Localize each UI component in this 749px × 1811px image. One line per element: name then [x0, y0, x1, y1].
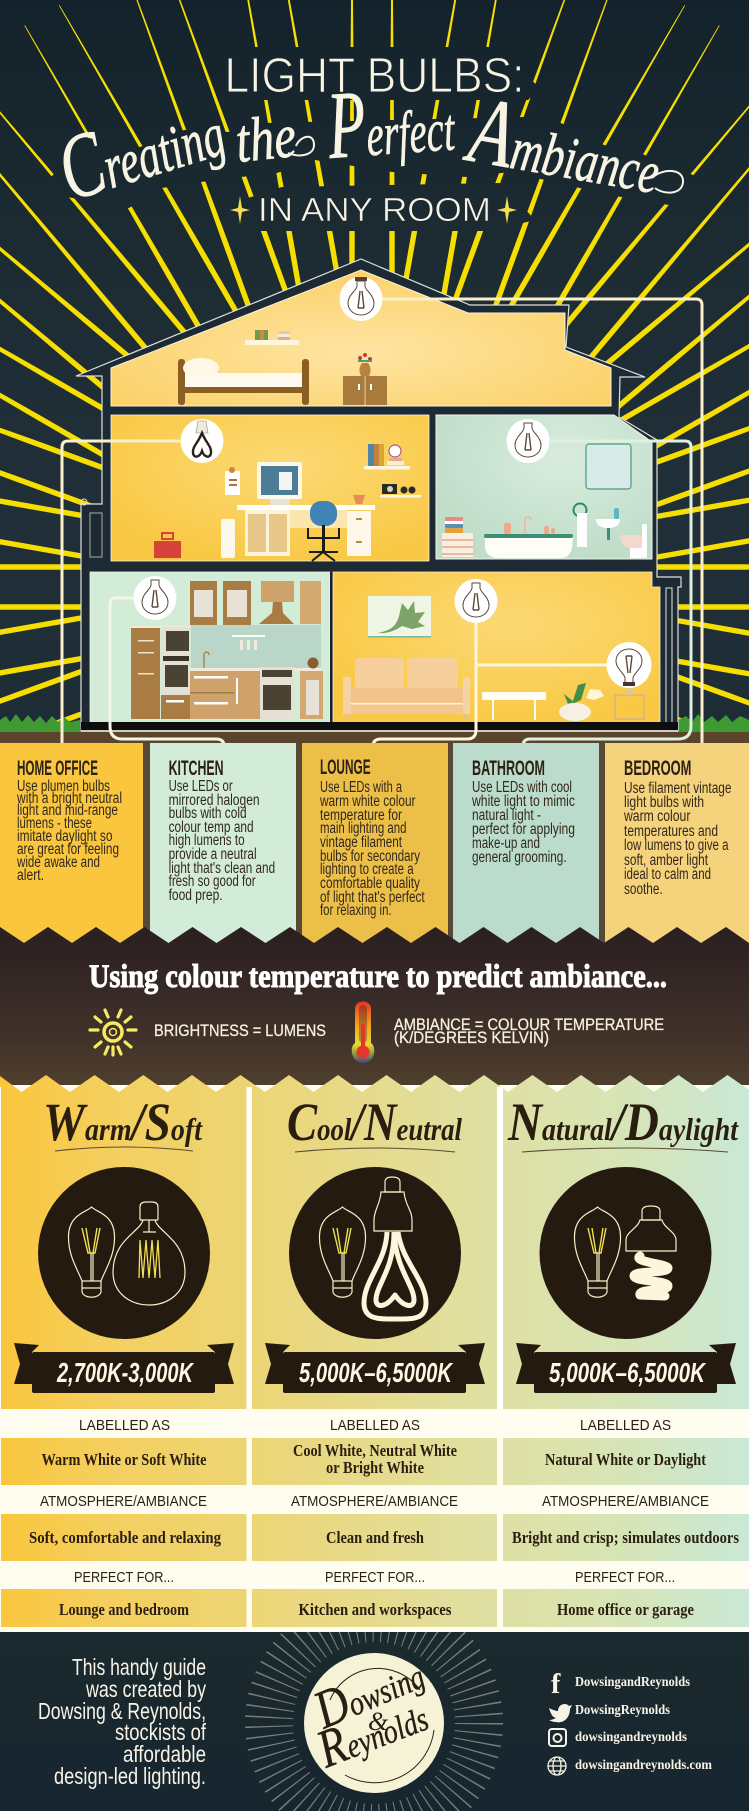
panel: kitchen: Use LEDs or: [169, 778, 233, 795]
table row: perfect for: Kitchen and workspaces: [298, 1600, 452, 1619]
comparison column tops: [0, 1075, 749, 1409]
panel: kitchen: light that's clean and: [169, 860, 275, 877]
bulb: lounge: [454, 579, 498, 623]
panel: bathroom: BATHROOM: [472, 757, 545, 780]
panel: home office: alert.: [17, 867, 44, 884]
room: lounge: [333, 572, 660, 723]
panel: kitchen: high lumens to: [169, 832, 245, 849]
panel: bathroom: white light to mimic: [471, 793, 575, 810]
panel: home office: lumens - these: [17, 815, 92, 832]
panel: bedroom: soothe.: [624, 881, 663, 898]
table row: perfect for: PERFECT FOR...: [74, 1569, 174, 1586]
panel: kitchen: mirrored halogen: [169, 792, 260, 809]
panel: home office: are great for feeling: [17, 841, 119, 858]
panel: home office: light and mid-range: [17, 802, 118, 819]
panel: kitchen: bulbs with cold: [169, 805, 247, 822]
table row: atmosphere: ATMOSPHERE/AMBIANCE: [40, 1493, 207, 1510]
label: brightness: BRIGHTNESS = LUMENS: [154, 1021, 326, 1040]
label: ambiance: (K/DEGREES KELVIN): [394, 1028, 549, 1047]
panel: kitchen: food prep.: [169, 887, 223, 904]
panel: home office: HOME OFFICE: [17, 757, 98, 780]
footer credit text: Dowsing & Reynolds,: [38, 1698, 206, 1724]
panel: home office: [0, 743, 143, 948]
panel: lounge: warm white colour: [319, 793, 416, 810]
panel: kitchen: KITCHEN: [169, 757, 224, 780]
panel: kitchen: colour temp and: [169, 819, 254, 836]
panel: bedroom: [605, 743, 749, 948]
title: the: [232, 102, 299, 176]
panel: bathroom: natural light -: [472, 807, 541, 824]
social links: dowsingandreynolds.com: [575, 1758, 712, 1773]
table row: labelled as: Warm White or Soft White: [42, 1450, 207, 1469]
panel: lounge: vintage filament: [320, 834, 403, 851]
ground and grass: [0, 714, 749, 750]
title: Creating: [46, 74, 235, 220]
house silhouette: [76, 259, 681, 731]
sun rays: [0, 0, 749, 722]
panel: bedroom: soft, amber light: [624, 852, 709, 869]
panel: lounge: of light that's perfect: [320, 889, 425, 906]
column: warm/soft: Warm/Soft: [43, 1092, 203, 1152]
icon: thermometer: [352, 1002, 374, 1063]
table row: atmosphere: [1, 1493, 749, 1561]
column: cool/neutral: 5,000K–6,5000K: [299, 1357, 453, 1388]
panel: lounge: lighting to create a: [320, 861, 414, 878]
table row: atmosphere: ATMOSPHERE/AMBIANCE: [291, 1493, 458, 1510]
title: IN ANY ROOM: [258, 191, 491, 228]
footer credit text: This handy guide: [72, 1654, 206, 1680]
panel: kitchen: provide a neutral: [169, 846, 257, 863]
panel: lounge: bulbs for secondary: [320, 848, 420, 865]
panel: kitchen: [150, 743, 296, 948]
room: kitchen: [90, 572, 333, 723]
table row: perfect for: [1, 1569, 749, 1627]
bulb: bedroom: [340, 277, 382, 321]
column: natural/daylight: [507, 1092, 739, 1393]
table row: perfect for: Lounge and bedroom: [59, 1600, 189, 1619]
title: Perfect: [323, 63, 458, 179]
title: [46, 49, 683, 228]
room: bedroom: [111, 270, 611, 406]
panel: kitchen: fresh so good for: [169, 873, 256, 890]
cream background for comparison table: [0, 1085, 749, 1632]
table row: atmosphere: ATMOSPHERE/AMBIANCE: [542, 1493, 709, 1510]
table row: labelled as: Cool White, Neutral White: [293, 1441, 457, 1460]
bulb: kitchen: [134, 576, 176, 620]
panel gaps: [143, 745, 605, 945]
panel: lounge: LOUNGE: [320, 756, 371, 779]
panel: bathroom: Use LEDs with cool: [472, 779, 572, 796]
logo: Dowsing: [304, 1641, 432, 1740]
column: natural/daylight: Natural/Daylight: [507, 1092, 739, 1152]
background sky: [0, 0, 749, 745]
panel: bedroom: temperatures and: [624, 823, 718, 840]
panel: bedroom: BEDROOM: [624, 757, 691, 780]
table row: labelled as: LABELLED AS: [580, 1417, 671, 1434]
footer credit text: design-led lighting.: [54, 1763, 206, 1789]
panel: lounge: main lighting and: [320, 820, 406, 837]
label: ambiance: [394, 1015, 664, 1047]
panel: bathroom: perfect for applying: [472, 821, 575, 838]
bulb: home office plumen: [180, 419, 224, 463]
table row: perfect for: PERFECT FOR...: [325, 1569, 425, 1586]
panel: home office: with a bright neutral: [16, 790, 122, 807]
title: Ambiance: [458, 75, 670, 214]
room: home office: [111, 415, 429, 561]
house structure details: [81, 499, 678, 731]
footer credit text: stockists of: [115, 1719, 206, 1745]
logo: &: [368, 1707, 389, 1736]
panel: home office: Use plumen bulbs: [17, 778, 110, 795]
dark colour temperature band: [0, 927, 749, 1100]
column: warm/soft: 2,700K-3,000K: [56, 1357, 194, 1388]
table row: atmosphere: Clean and fresh: [326, 1528, 424, 1547]
table row: perfect for: Home office or garage: [557, 1600, 694, 1619]
panel: bathroom: [453, 743, 599, 948]
social links: DowsingReynolds: [575, 1703, 670, 1718]
wiring from bulbs to panels: [62, 299, 702, 746]
column: cool/neutral: Cool/Neutral: [287, 1092, 462, 1152]
icon: sun brightness: [90, 1010, 136, 1055]
column: warm/soft: [14, 1092, 234, 1393]
table row: labelled as: Natural White or Daylight: [545, 1450, 706, 1469]
footer background: [0, 1632, 749, 1811]
footer credit text: affordable: [123, 1741, 206, 1767]
panel: bathroom: make-up and: [472, 835, 540, 852]
social links: f: [551, 1669, 561, 1700]
social links: [548, 1669, 712, 1775]
table row: labelled as: LABELLED AS: [79, 1417, 170, 1434]
panel: home office: wide awake and: [16, 854, 100, 871]
panel: lounge: comfortable quality: [320, 875, 420, 892]
footer credit text: [38, 1654, 206, 1789]
panel: bedroom: light bulbs with: [624, 794, 704, 811]
social links: DowsingandReynolds: [575, 1675, 690, 1690]
section heading: Using colour temperature to predict ambiance...: [89, 959, 667, 995]
panel: bathroom: general grooming.: [472, 849, 567, 866]
panel: bedroom: warm colour: [623, 808, 690, 825]
table row: perfect for: PERFECT FOR...: [575, 1569, 675, 1586]
label: ambiance: AMBIANCE = COLOUR TEMPERATURE: [394, 1015, 664, 1034]
panel: bedroom: ideal to calm and: [624, 866, 711, 883]
panel: home office: imitate daylight so: [17, 828, 112, 845]
bulb: bathroom: [506, 419, 550, 463]
title: LIGHT BULBS:: [224, 49, 524, 103]
panel: lounge: for relaxing in.: [320, 902, 392, 919]
table row: labelled as: [1, 1417, 749, 1485]
room: bathroom: [436, 415, 652, 559]
footer credit text: was created by: [85, 1676, 206, 1702]
table row: atmosphere: Soft, comfortable and relaxing: [29, 1528, 221, 1547]
logo: Reynolds: [308, 1683, 435, 1779]
social links: dowsingandreynolds: [575, 1730, 687, 1745]
panel: lounge: Use LEDs with a: [320, 779, 402, 796]
table row: labelled as: LABELLED AS: [330, 1417, 420, 1434]
logo: [269, 1618, 479, 1811]
bulb: table lamp: [606, 642, 652, 688]
column: cool/neutral: [265, 1092, 485, 1393]
panel: lounge: temperature for: [320, 807, 402, 824]
table row: labelled as: or Bright White: [326, 1458, 424, 1477]
panel: lounge: [302, 743, 448, 948]
